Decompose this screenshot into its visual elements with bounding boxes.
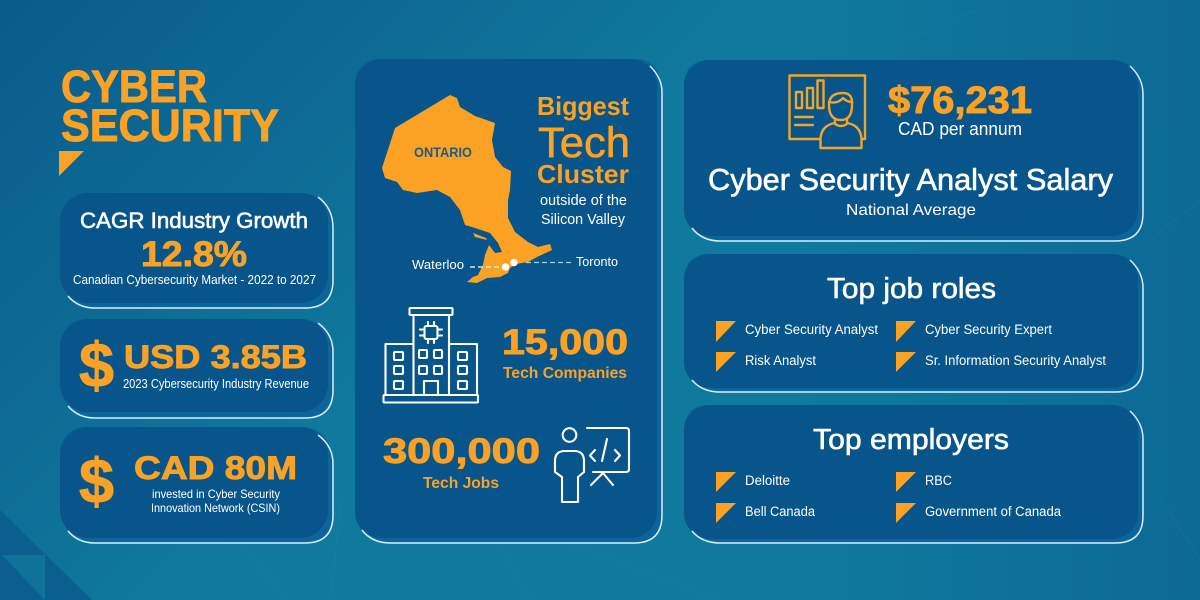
heading: biggest tech cluster xyxy=(537,91,630,228)
icon: dollar sign: $ xyxy=(79,331,114,401)
title accent triangle xyxy=(59,151,84,176)
list item xyxy=(716,472,790,492)
list item xyxy=(716,352,816,372)
background triangles xyxy=(0,510,92,600)
list item: RBC xyxy=(925,473,952,488)
map label: ONTARIO xyxy=(414,144,472,160)
panel: CSIN investment xyxy=(60,427,333,543)
list item: Cyber Security Expert xyxy=(925,322,1052,337)
heading: biggest tech cluster: outside of the xyxy=(540,193,627,209)
list item xyxy=(716,321,878,342)
heading: biggest tech cluster: Tech xyxy=(538,119,630,167)
panel: top employers xyxy=(684,405,1143,543)
title: CYBER xyxy=(61,61,207,112)
panel: industry revenue: 2023 Cybersecurity Industry Revenue xyxy=(123,377,309,391)
heading: biggest tech cluster: Cluster xyxy=(537,159,629,189)
stat: tech companies: Tech Companies xyxy=(503,365,627,382)
panel: salary xyxy=(684,60,1143,241)
panel: CSIN investment: CAD 80M xyxy=(134,450,297,486)
panel: CSIN investment: Innovation Network (CSIN) xyxy=(151,501,280,515)
map callout: Toronto: Toronto xyxy=(576,254,618,269)
list item xyxy=(896,503,1061,523)
panel: salary: CAD per annum xyxy=(898,119,1022,139)
map: Ontario xyxy=(382,95,552,283)
list item xyxy=(716,503,815,523)
list item xyxy=(896,352,1106,372)
stat: tech companies xyxy=(502,323,628,382)
stat: tech jobs: 300,000 xyxy=(383,432,540,471)
icon: dollar sign: $ xyxy=(79,447,114,517)
map callout: Waterloo xyxy=(412,257,509,272)
icon: tech building xyxy=(384,308,478,402)
panel: top job roles xyxy=(684,254,1143,392)
list item xyxy=(896,321,1052,342)
panel: CAGR industry growth: Canadian Cybersecurity Market - 2022 to 2027 xyxy=(73,272,316,287)
panel: CSIN investment: invested in Cyber Security xyxy=(152,487,280,501)
list item: Cyber Security Analyst xyxy=(745,322,878,337)
panel: salary: National Average xyxy=(846,202,976,219)
list item: Bell Canada xyxy=(745,504,815,519)
stat: tech jobs: Tech Jobs xyxy=(423,475,499,492)
title xyxy=(61,61,279,151)
panel: CAGR industry growth: 12.8% xyxy=(141,235,247,274)
panel: CAGR industry growth: CAGR Industry Growth xyxy=(80,208,308,233)
heading: biggest tech cluster: Biggest xyxy=(537,91,629,121)
heading: biggest tech cluster: Silicon Valley xyxy=(541,212,626,228)
panel: top job roles: Top job roles xyxy=(827,273,996,305)
list item: Deloitte xyxy=(745,473,790,488)
list item xyxy=(896,472,952,492)
list item: Risk Analyst xyxy=(745,353,816,368)
stat: tech companies: 15,000 xyxy=(502,323,628,362)
icon: analyst with chart xyxy=(790,76,865,148)
map callout: Waterloo: Waterloo xyxy=(412,257,464,272)
stat: tech jobs xyxy=(383,432,540,492)
map callout: Toronto xyxy=(510,254,618,269)
list item: Government of Canada xyxy=(925,504,1061,519)
title: SECURITY xyxy=(61,100,279,151)
panel: industry revenue: USD 3.85B xyxy=(124,339,307,375)
list item: Sr. Information Security Analyst xyxy=(925,353,1106,368)
icon: developer presenting code xyxy=(555,428,629,502)
panel: industry revenue xyxy=(60,319,333,418)
panel: tech cluster xyxy=(355,59,662,543)
panel: salary: $76,231 xyxy=(888,80,1032,122)
panel: CAGR industry growth xyxy=(60,193,333,308)
panel: top employers: Top employers xyxy=(813,424,1009,456)
panel: salary: Cyber Security Analyst Salary xyxy=(708,162,1113,197)
